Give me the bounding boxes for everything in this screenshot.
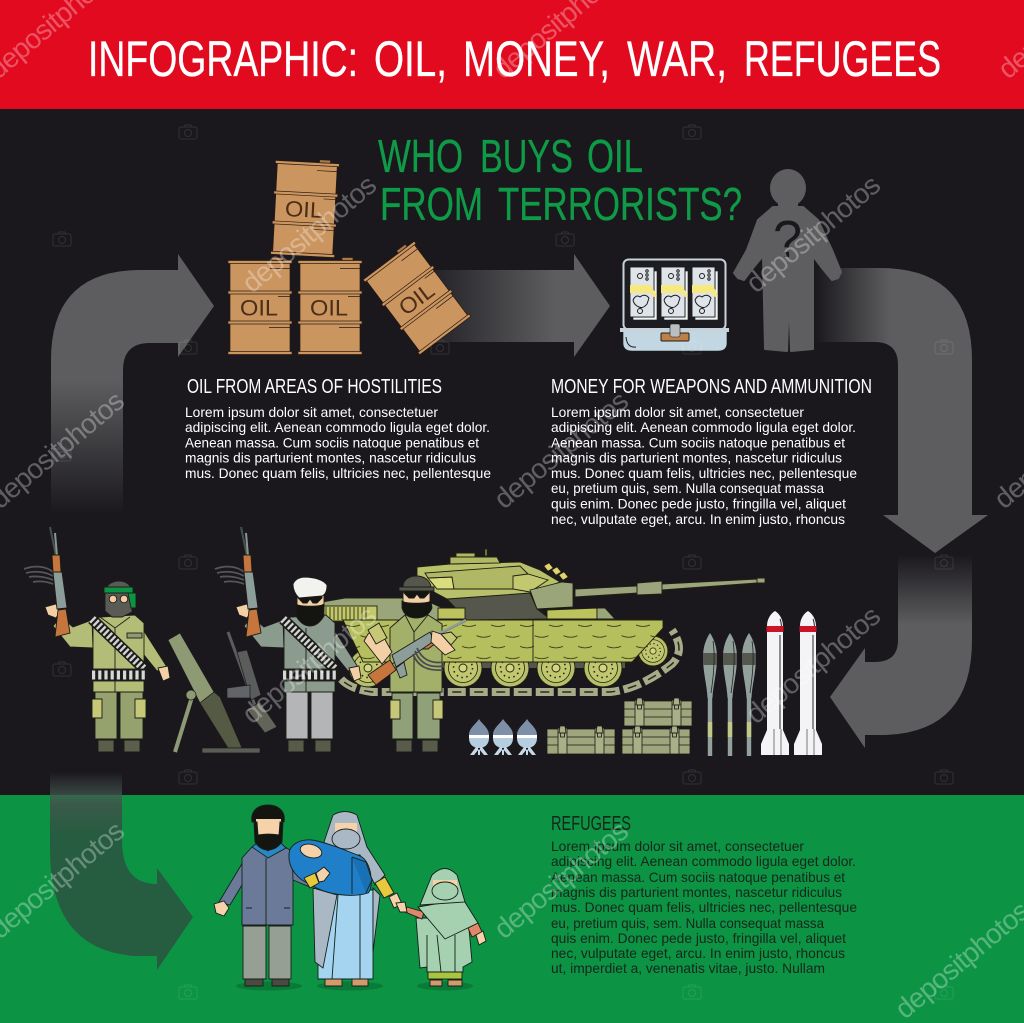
face <box>297 592 324 608</box>
text block: refugees: Aenean massa. Cum sociis natoque penatibus et <box>551 870 845 885</box>
boots <box>98 740 140 752</box>
watermark text: depositphotos <box>488 815 634 945</box>
heading: who buys oil: BUYS <box>480 130 573 182</box>
raised arm <box>53 617 93 648</box>
mortar <box>168 633 260 753</box>
text block: oil from areas: magnis dis parturient montes, nascetur ridiculus <box>185 450 476 466</box>
text block: money for weapons <box>551 405 857 527</box>
beard <box>402 601 432 618</box>
flow arrow: down-left to weapons <box>830 555 972 748</box>
tank turret highlight <box>428 577 454 589</box>
heading: who buys oil: TERRORISTS? <box>498 178 742 230</box>
beanie <box>399 576 434 591</box>
sunglasses <box>298 596 322 603</box>
title <box>88 30 941 87</box>
barrel top <box>271 157 340 258</box>
title: WAR, <box>627 30 727 87</box>
soldier: masked fighter with green headband <box>24 527 170 752</box>
boots <box>396 740 438 752</box>
barrel top: OIL <box>284 196 324 223</box>
woman <box>313 812 402 986</box>
heading: oil from areas of hostilities: OIL FROM AREAS OF HOSTILITIES <box>187 376 442 398</box>
bandolier <box>283 619 335 669</box>
text block: refugees: nec, vulputate eget, arcu. In enim justo, rhoncus <box>551 946 845 961</box>
assault rifle <box>24 527 70 637</box>
text block: refugees: adipiscing elit. Aenean commodo ligula eget dolor. <box>551 854 856 869</box>
barrel bottom left: OIL <box>240 296 278 320</box>
heading: who buys oil: OIL <box>587 130 643 182</box>
heading: who buys oil <box>378 130 742 230</box>
tank <box>322 549 765 692</box>
jacket <box>93 615 144 692</box>
banknotes <box>630 267 718 320</box>
ammunition: two missiles <box>761 611 822 755</box>
text block: oil from areas: adipiscing elit. Aenean commodo ligula eget dolor. <box>185 420 490 435</box>
watermark text: depositphotos <box>236 600 382 730</box>
boots <box>288 740 331 752</box>
text block: refugees: quis enim. Donec pede justo, fringilla vel, aliquet <box>551 931 846 946</box>
refugee family <box>214 805 486 990</box>
question mark: ? <box>773 211 802 269</box>
tank tracks <box>341 630 679 692</box>
watermark cameras <box>53 125 953 999</box>
watermark text: depositphotos <box>236 169 382 299</box>
man <box>214 805 315 986</box>
sunglasses <box>404 591 429 598</box>
flow arrow: refugees-side up to oil <box>51 254 214 515</box>
assault rifle <box>215 527 261 637</box>
machine gun <box>227 632 277 733</box>
tank road wheels <box>349 649 625 687</box>
text block: refugees: eu, pretium quis, sem. Nulla consequat massa <box>551 916 824 931</box>
headband <box>104 587 136 608</box>
trousers <box>95 692 143 739</box>
text block: oil from areas <box>185 405 491 481</box>
bandolier <box>92 619 144 669</box>
tank turret <box>417 562 560 599</box>
raised arm <box>244 617 284 648</box>
goggles eyes <box>109 595 128 603</box>
icon: oil barrels stack <box>228 157 471 355</box>
text block: money for weapons: Aenean massa. Cum sociis natoque penatibus et <box>551 436 845 450</box>
text block: oil from areas: mus. Donec quam felis, ultricies nec, pellentesque <box>185 466 491 481</box>
forearms and sleeves <box>364 627 392 664</box>
jacket <box>284 615 335 692</box>
hands <box>45 604 170 681</box>
trousers <box>286 692 333 739</box>
text block: money for weapons: eu, pretium quis, sem. Nulla consequat massa <box>551 481 824 496</box>
pockets <box>390 700 443 719</box>
watermark text: depositphotos <box>740 169 886 299</box>
ammo belt <box>282 669 339 681</box>
face <box>403 590 430 604</box>
title: OIL, <box>374 30 447 87</box>
tank drive wheel <box>637 635 669 667</box>
hands <box>236 604 361 681</box>
beard <box>296 604 324 626</box>
tank hatch <box>450 549 500 564</box>
ammo belt <box>91 669 148 681</box>
tank stowage boxes <box>438 608 597 619</box>
tank mantlet <box>530 582 573 609</box>
trousers <box>392 693 440 739</box>
title: REFUGEES <box>744 30 941 87</box>
red header band <box>0 0 1024 109</box>
text block: refugees: ut, imperdiet a, venenatis vitae, justo. Nullam <box>551 961 825 976</box>
text block: money for weapons: Lorem ipsum dolor sit amet, consectetuer <box>551 405 804 420</box>
text block: money for weapons: mus. Donec quam felis, ultricies nec, pellentesque <box>551 466 857 481</box>
head mask <box>105 581 132 617</box>
rifle across chest <box>368 620 466 685</box>
text block: refugees: Lorem ipsum dolor sit amet, consectetuer <box>551 839 804 854</box>
right arm <box>135 617 167 671</box>
icon: briefcase of money <box>620 260 729 351</box>
title: INFOGRAPHIC: <box>88 30 358 87</box>
icon: mystery buyer silhouette <box>734 169 841 351</box>
text block: oil from areas: Aenean massa. Cum sociis natoque penatibus et <box>185 436 479 450</box>
barrel tipped <box>361 239 471 355</box>
right arm <box>326 617 358 671</box>
pockets <box>92 699 146 718</box>
ammunition: three crates <box>547 698 692 754</box>
baby in blue wrap <box>289 840 372 895</box>
barrel bottom right <box>298 258 362 354</box>
tank rear box <box>322 598 447 622</box>
flow arrow: buyer down to weapons <box>815 268 988 553</box>
jacket <box>390 615 442 692</box>
barrel tipped: OIL <box>394 278 439 320</box>
text block: oil from areas: Lorem ipsum dolor sit amet, consectetuer <box>185 405 438 420</box>
heading: who buys oil: WHO <box>378 130 463 182</box>
text block: refugees <box>551 839 857 976</box>
watermark text: depositphotos <box>488 385 634 515</box>
barrel bottom right: OIL <box>310 296 348 320</box>
text block: money for weapons: nec, vulputate eget, arcu. In enim justo, rhoncus <box>551 512 845 527</box>
heading: who buys oil: FROM <box>380 178 483 230</box>
heading: money for weapons: MONEY FOR WEAPONS AND AMMUNITION <box>551 376 872 398</box>
flow arrow: oil to money <box>425 254 610 357</box>
tank hull <box>343 620 663 662</box>
text block: refugees: mus. Donec quam felis, ultricies nec, pellentesque <box>551 900 857 915</box>
tank gun barrel <box>575 578 765 597</box>
text block: money for weapons: magnis dis parturient montes, nascetur ridiculus <box>551 450 842 466</box>
soldier: beanie fighter holding rifle <box>364 576 466 752</box>
text block: refugees: magnis dis parturient montes, nascetur ridiculus <box>551 885 842 900</box>
tank dark underbody <box>447 593 550 620</box>
ammunition: three mortar shells <box>469 719 537 755</box>
green refugee band background <box>0 795 1024 1023</box>
ground shadows <box>236 982 473 990</box>
flow arrow: war to refugees <box>50 772 193 970</box>
watermark text: depositphotos <box>740 600 886 730</box>
barrel bottom left <box>228 258 292 354</box>
text block: money for weapons: adipiscing elit. Aenean commodo ligula eget dolor. <box>551 420 856 435</box>
girl <box>396 868 486 986</box>
ammunition: three rockets <box>703 633 756 756</box>
turban <box>293 577 327 598</box>
heading: refugees: REFUGEES <box>551 813 631 835</box>
soldier: turbaned fighter <box>215 527 361 752</box>
title: MONEY, <box>463 30 610 87</box>
man hand on baby <box>304 867 330 888</box>
text block: money for weapons: quis enim. Donec pede justo, fringilla vel, aliquet <box>551 496 846 512</box>
